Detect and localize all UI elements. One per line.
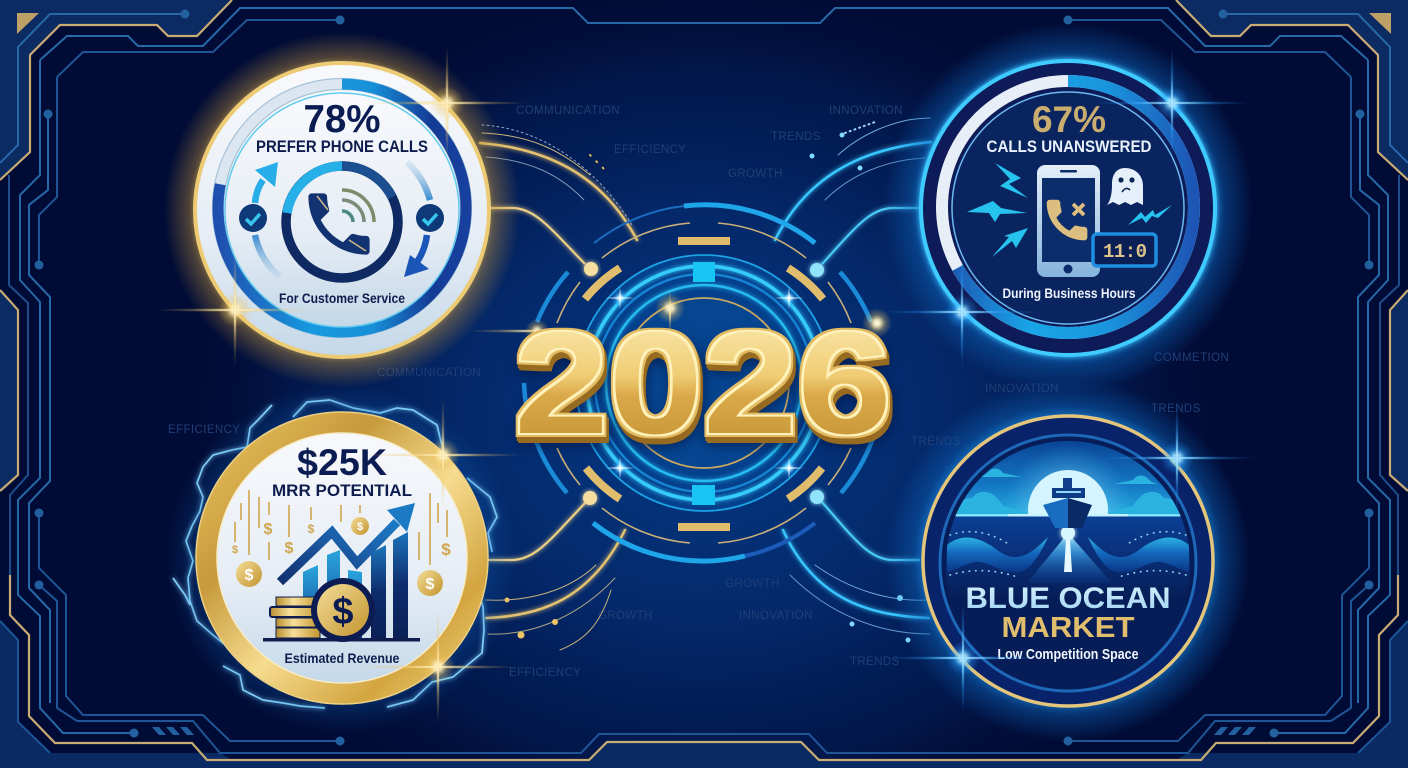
bar chart: [263, 503, 420, 642]
heading: CALLS UNANSWERED: [986, 138, 1152, 156]
cyan arc streaks: right side: [775, 118, 931, 642]
gold arc streaks: left side: [480, 125, 637, 650]
caption: For Customer Service: [279, 290, 405, 306]
stat: $25K: $25K: [297, 442, 387, 483]
heading: market: MARKET: [1002, 612, 1135, 644]
background keywords: COMMUNICATION: [377, 367, 481, 379]
background keywords: TRENDS: [771, 131, 821, 143]
background keywords: TRENDS: [850, 656, 900, 668]
thin gold arcs: [557, 223, 851, 543]
connector: cyan bottom right: [810, 490, 920, 560]
falling coins: $: [441, 540, 451, 559]
connector: cyan top right: [810, 208, 920, 277]
gold bars: [585, 241, 823, 527]
outer cyan arcs: [524, 205, 884, 561]
cyan rings: [576, 255, 832, 511]
icon: ship: [1043, 478, 1092, 528]
falling coins: [232, 490, 451, 596]
background keywords: GROWTH: [598, 610, 653, 622]
background keywords: INNOVATION: [829, 105, 903, 117]
falling coins: $: [285, 540, 294, 557]
heading: blue ocean: BLUE OCEAN: [966, 582, 1170, 615]
icon: digital clock: [1093, 234, 1156, 266]
background keywords: EFFICIENCY: [509, 667, 581, 679]
icon: lightning bolts: [967, 163, 1172, 257]
falling coins: $: [245, 567, 254, 584]
heading: MRR POTENTIAL: [272, 482, 412, 500]
caption: Low Competition Space: [998, 646, 1138, 663]
background keywords: COMMETION: [1154, 352, 1229, 364]
ocean scene: [946, 441, 1190, 588]
stat: 78%: 78%: [303, 98, 381, 141]
light flares on centre rings: [467, 286, 892, 480]
background keywords: GROWTH: [728, 168, 783, 180]
caption: Estimated Revenue: [284, 650, 400, 666]
background keywords: COMMUNICATION: [516, 105, 620, 117]
connector: gold top left: [490, 208, 598, 276]
background keywords: EFFICIENCY: [614, 144, 686, 156]
falling coins: $: [264, 521, 273, 538]
central HUD rings: [524, 205, 884, 561]
icon: coin stack: [270, 578, 375, 642]
icon: ghost: [1107, 168, 1143, 205]
icon: phone ring: [286, 166, 398, 278]
icon: digital clock: 11:0: [1103, 241, 1147, 263]
icon: arrows and checks: [239, 162, 444, 277]
falling coins: $: [232, 544, 238, 556]
connector: gold bottom left: [488, 491, 597, 560]
icon: phone: [1037, 165, 1100, 277]
panel: blue ocean market: [886, 378, 1250, 742]
lightning around revenue badge: [173, 400, 497, 708]
background keywords: TRENDS: [911, 436, 961, 448]
falling coins: $: [308, 522, 315, 536]
falling coins: $: [426, 576, 435, 593]
panel: $25K MRR potential: [167, 383, 517, 733]
stat: 67%: 67%: [1032, 99, 1106, 140]
panel: 78% prefer phone calls: [164, 32, 520, 388]
caption: During Business Hours: [1002, 285, 1136, 301]
background keywords: GROWTH: [725, 578, 780, 590]
background keywords: INNOVATION: [985, 383, 1059, 395]
background keywords: [168, 105, 1229, 679]
heading: PREFER PHONE CALLS: [256, 138, 428, 156]
panel: 67% calls unanswered: [883, 23, 1253, 393]
falling coins: $: [357, 521, 363, 533]
title: 2026: 2026: [514, 303, 892, 464]
background keywords: INNOVATION: [739, 610, 813, 622]
icon: coin stack: $: [332, 591, 354, 633]
flares on badge rims: [155, 45, 1257, 725]
background keywords: TRENDS: [1151, 403, 1201, 415]
background keywords: EFFICIENCY: [168, 424, 240, 436]
